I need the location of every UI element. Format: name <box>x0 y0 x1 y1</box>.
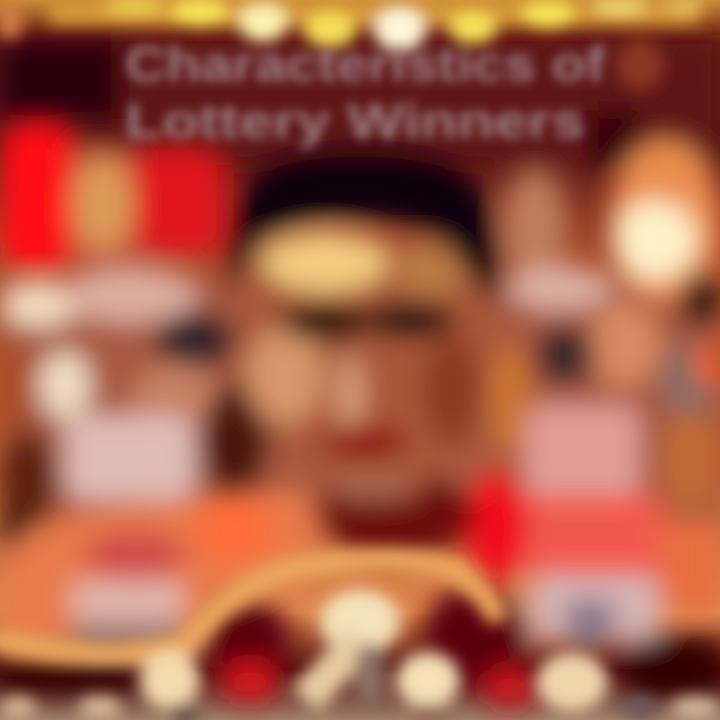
eyes and brows <box>279 302 456 340</box>
panel: top lights <box>0 0 705 91</box>
portrait: central man <box>227 148 500 560</box>
title <box>125 38 606 149</box>
panel: left side crowd <box>0 125 269 563</box>
panel: lower jackets <box>0 470 720 652</box>
hair <box>227 148 500 305</box>
panel: lower red shadows <box>0 585 720 708</box>
title: Characteristics of <box>125 38 606 92</box>
panel: neck shadow <box>315 470 475 560</box>
panel: poker chips and coins <box>0 590 720 720</box>
panel: dark backdrop <box>0 35 720 520</box>
mouth <box>323 425 407 459</box>
title: Lottery Winners <box>125 95 585 149</box>
face <box>245 232 490 501</box>
panel: arms and hands <box>0 560 495 654</box>
panel: right side crowd <box>490 140 720 508</box>
